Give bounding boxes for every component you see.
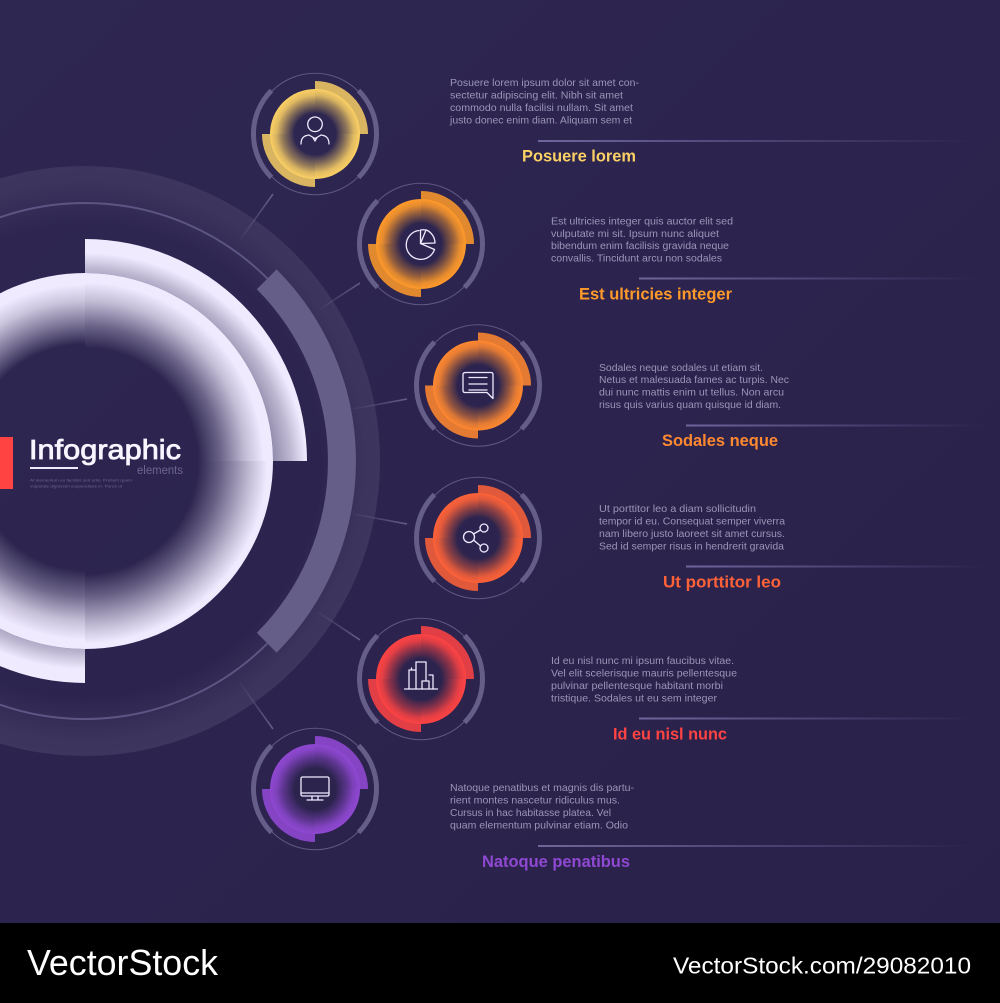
text block 5: Vel elit scelerisque mauris pellentesque	[551, 668, 737, 680]
heading 5: Id eu nisl nunc	[613, 726, 727, 744]
text block 1	[449, 78, 975, 166]
text block 4: tempor id eu. Consequat semper viverra	[599, 516, 785, 528]
text block 4: nam libero justo laoreet sit amet cursus.	[599, 529, 785, 540]
text block 1: commodo nulla facilisi nullam. Sit amet	[450, 103, 633, 114]
outer translucent ring	[0, 166, 380, 756]
heading 6: Natoque penatibus	[482, 853, 630, 871]
text block 5: Id eu nisl nunc mi ipsum faucibus vitae.	[551, 656, 734, 667]
text block 2	[551, 216, 979, 304]
badge 3: orange	[416, 325, 540, 446]
outer segment bottom left	[0, 461, 85, 683]
text block 1: Posuere lorem ipsum dolor sit amet con-	[450, 78, 639, 89]
footer logo: VectorStock	[27, 942, 219, 983]
text block 2: convallis. Tincidunt arcu non sodales	[551, 254, 722, 264]
icon: person	[301, 117, 329, 144]
icon: share nodes	[464, 524, 488, 552]
text block 5	[551, 656, 979, 744]
central glowing disc	[0, 273, 273, 649]
outer segment top right	[85, 239, 307, 461]
thick grey arc	[267, 279, 342, 643]
footer url: VectorStock.com/29082010	[673, 952, 971, 978]
text block 3: dui nunc mattis enim ut tellus. Non arcu	[599, 388, 784, 398]
thin ring	[0, 203, 267, 719]
small description: vulputate dignissim suspendisse in. Purus ut	[30, 484, 123, 488]
subtitle: elements	[137, 465, 183, 477]
connector lines	[240, 194, 407, 729]
red accent bar	[0, 437, 13, 489]
text block 4: Sed id semper risus in hendrerit gravida	[599, 542, 784, 552]
text block 2: Est ultricies integer quis auctor elit sed	[551, 216, 733, 228]
heading 1: Posuere lorem	[522, 148, 636, 166]
text block 6	[450, 783, 975, 871]
text block 6: rient montes nascetur ridiculus mus.	[450, 796, 620, 806]
text block 4	[599, 504, 984, 592]
text block 6: Cursus in hac habitasse platea. Vel	[450, 808, 611, 819]
text block 2: bibendum enim facilisis gravida neque	[551, 241, 729, 252]
text block 1: justo donec enim diam. Aliquam sem et	[449, 116, 632, 126]
text block 6: Natoque penatibus et magnis dis partu-	[450, 783, 634, 794]
main radial diagram	[0, 166, 380, 756]
badge 5: red	[359, 618, 483, 740]
footer bar	[0, 923, 1000, 1003]
badge 1: yellow	[253, 73, 377, 195]
text block 5: tristique. Sodales ut eu sem integer	[551, 694, 718, 704]
badge 6: purple	[253, 728, 377, 850]
title underline	[30, 467, 78, 469]
icon: buildings	[404, 662, 438, 689]
text block 3: Netus et malesuada fames ac turpis. Nec	[599, 375, 789, 386]
title: Infographic	[29, 434, 181, 465]
icon: speech bubble	[463, 372, 493, 398]
icon: monitor	[301, 777, 329, 800]
text block 6: quam elementum pulvinar etiam. Odio	[450, 820, 628, 832]
heading 3: Sodales neque	[662, 432, 778, 450]
badge 4: red orange	[416, 477, 540, 599]
icon: pie chart	[406, 230, 435, 259]
text block 3: Sodales neque sodales ut etiam sit.	[599, 363, 763, 374]
heading 4: Ut porttitor leo	[663, 574, 781, 592]
text block 1: sectetur adipiscing elit. Nibh sit amet	[450, 90, 623, 102]
small description	[30, 478, 133, 488]
badge 2: amber	[359, 183, 483, 305]
text block 3: risus quis varius quam quisque id diam.	[599, 400, 781, 411]
text block 5: pulvinar pellentesque habitant morbi	[551, 681, 723, 692]
text block 2: vulputate mi sit. Ipsum nunc aliquet	[551, 229, 719, 240]
text block 3	[599, 363, 984, 450]
heading 2: Est ultricies integer	[579, 286, 733, 304]
small description: At elementum eu facilisis sed odio. Pretium quam	[30, 478, 133, 482]
text block 4: Ut porttitor leo a diam sollicitudin	[599, 504, 756, 515]
title block	[0, 434, 183, 489]
